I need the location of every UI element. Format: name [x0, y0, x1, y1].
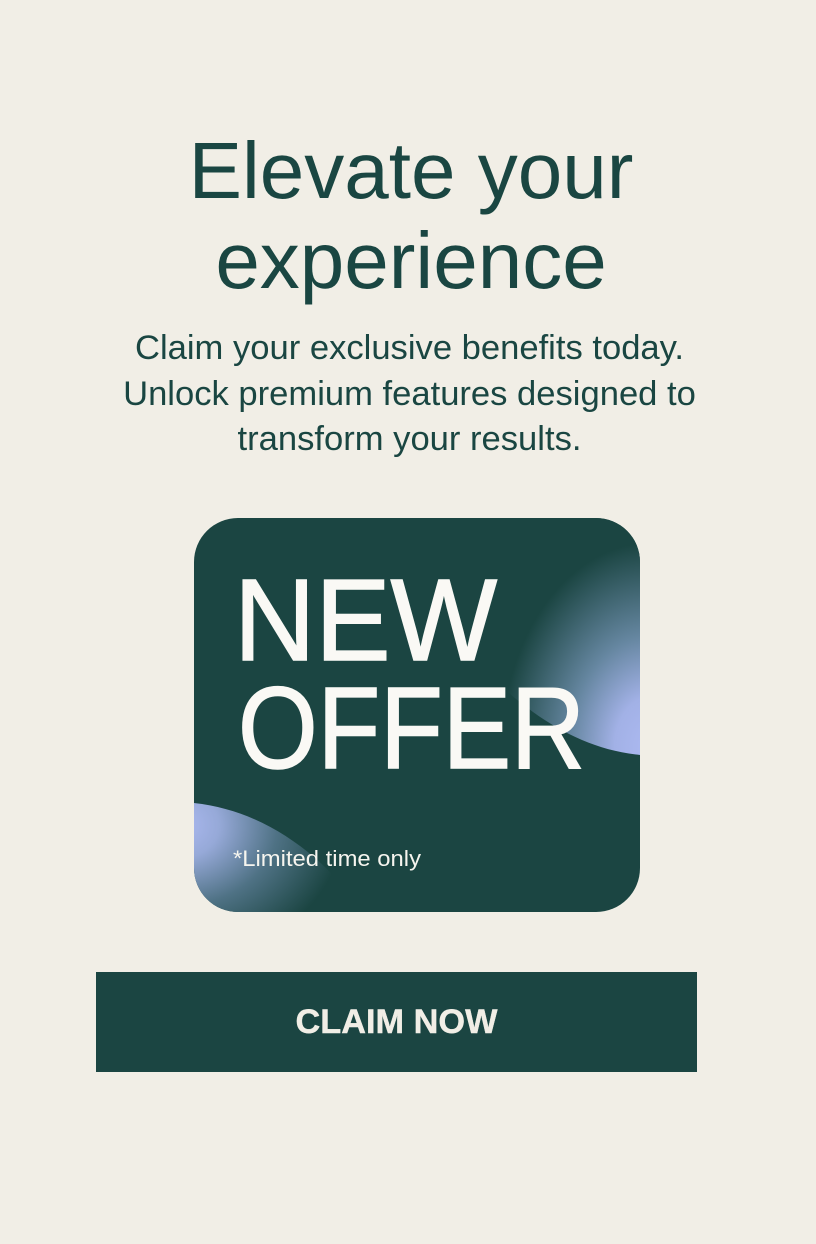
gradient wave: bottom left [194, 803, 326, 912]
note: limited time: *Limited time only [233, 846, 421, 871]
title: Elevate your [189, 126, 633, 215]
subtitle text block: transform your results. [238, 420, 581, 458]
subtitle text block: Unlock premium features designed to [123, 374, 696, 412]
title: experience [215, 216, 607, 305]
offer card [194, 518, 640, 912]
subtitle text block: Claim your exclusive benefits today. [135, 329, 684, 367]
claim button: CLAIM NOW [296, 1003, 497, 1041]
claim button [96, 972, 697, 1072]
headline: new offer: OFFER [238, 663, 585, 793]
title [189, 126, 633, 305]
gradient wave: top right [500, 518, 640, 755]
card background [194, 518, 640, 912]
headline: new offer: NEW [234, 555, 497, 685]
subtitle text block [123, 329, 696, 458]
headline: new offer [234, 555, 585, 793]
